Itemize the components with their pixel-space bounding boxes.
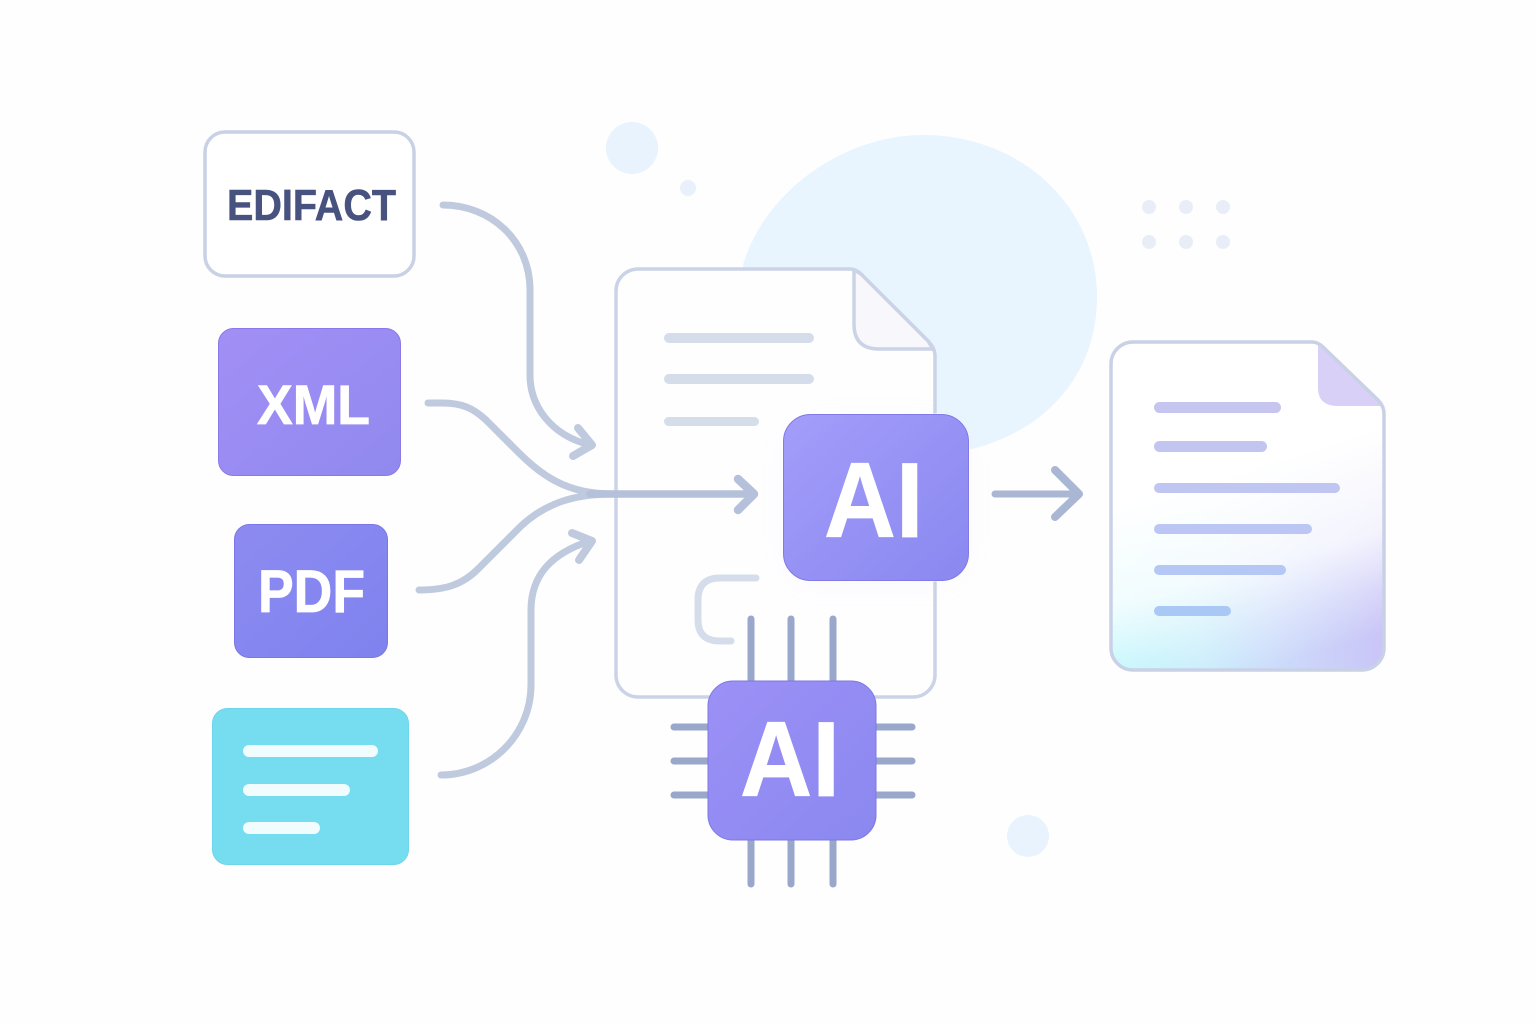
chip body xyxy=(708,681,876,840)
decorative dot grid xyxy=(1142,200,1230,249)
decorative circle: top left xyxy=(606,122,658,174)
icon: AI chip xyxy=(674,619,912,884)
arrow: PDF merging to AI xyxy=(419,494,612,590)
icon: AI block xyxy=(782,414,970,582)
card: plain text xyxy=(212,708,408,864)
card: PDF xyxy=(234,524,388,658)
decorative circle: small xyxy=(680,180,696,196)
output document text lines xyxy=(1154,402,1340,616)
card: EDIFACT xyxy=(205,132,414,276)
chip label: AI xyxy=(740,699,840,819)
arrow: AI to output document xyxy=(995,470,1079,517)
arrow: text card to document xyxy=(441,533,592,775)
icon: AI block: AI xyxy=(824,440,924,560)
decorative circle: bottom xyxy=(1007,815,1049,857)
arrow: EDIFACT to document xyxy=(443,205,592,456)
panel: central source document xyxy=(616,269,935,697)
card: XML: XML xyxy=(257,373,370,436)
decorative circle: large light blue xyxy=(743,135,1097,450)
card: PDF: PDF xyxy=(258,558,365,625)
card: XML xyxy=(218,328,400,476)
AI block soft shadow xyxy=(790,425,962,580)
chip pins xyxy=(674,619,912,884)
document fold xyxy=(854,270,933,349)
document bracket line xyxy=(698,578,756,641)
panel: output document xyxy=(1111,342,1384,670)
arrow: merged line into AI block xyxy=(590,479,754,510)
output document fold xyxy=(1318,344,1381,406)
output document outline xyxy=(1111,342,1384,670)
card: EDIFACT: EDIFACT xyxy=(227,181,396,230)
document text lines xyxy=(664,333,814,426)
arrow: XML merging to AI xyxy=(428,403,612,494)
